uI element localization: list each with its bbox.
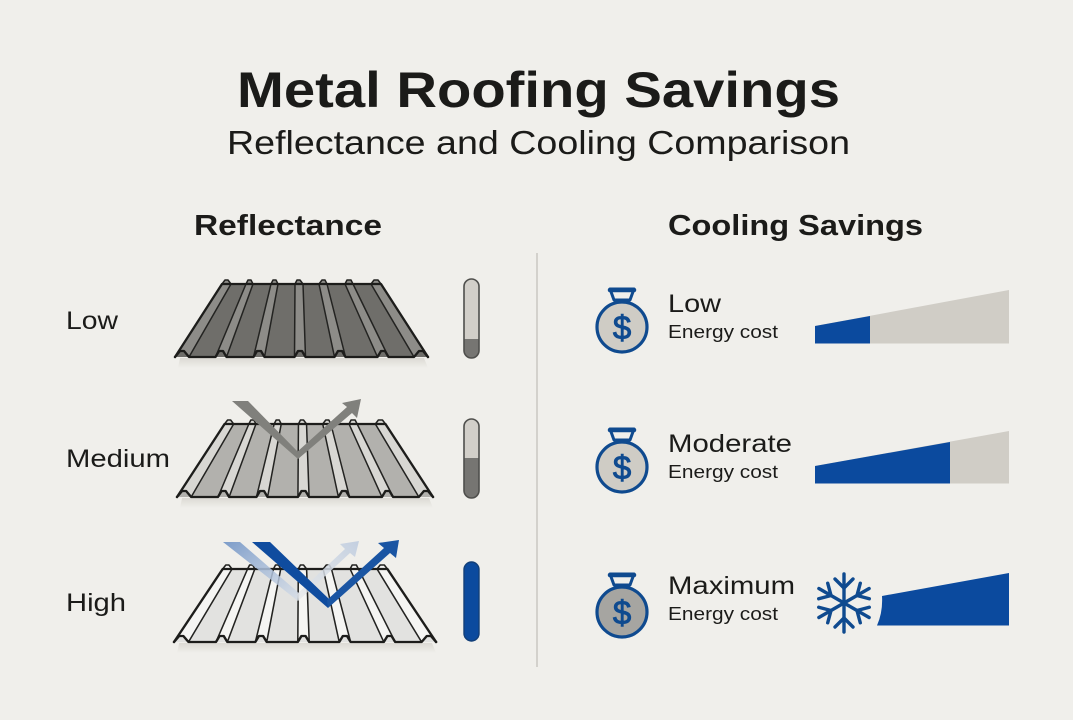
reflection arrows: medium (232, 399, 361, 459)
caption: energy cost, low: Energy cost (668, 322, 778, 342)
reflection arrows: high (223, 540, 399, 608)
roof panel: low reflectance, dark (175, 280, 428, 368)
heading: reflectance: Reflectance (194, 210, 382, 242)
reflectance gauge: low (464, 279, 479, 358)
label: moderate savings: Moderate (668, 430, 792, 458)
reflectance gauge: high (464, 562, 479, 641)
icon: money bag, low (597, 289, 647, 352)
icon: money bag, maximum (597, 574, 647, 637)
subtitle: Reflectance and Cooling Comparison (227, 124, 850, 161)
icon: money bag, maximum: $ (613, 594, 631, 631)
icon: money bag, low: $ (613, 309, 631, 346)
savings bar: low (815, 290, 1009, 344)
roof panel: medium reflectance, grey (177, 420, 433, 508)
savings bar: moderate (815, 431, 1009, 484)
caption: energy cost, maximum: Energy cost (668, 604, 778, 624)
caption: energy cost, moderate: Energy cost (668, 462, 778, 482)
title: Metal Roofing Savings (237, 62, 840, 118)
column divider (536, 253, 538, 667)
reflectance gauge: medium (464, 419, 479, 498)
row label: medium reflectance: Medium (66, 445, 170, 473)
savings bar: maximum (877, 573, 1009, 626)
label: low savings: Low (668, 290, 722, 318)
roof panel: high reflectance, light (174, 565, 436, 653)
row label: high reflectance: High (66, 589, 126, 617)
icon: money bag, moderate (597, 429, 647, 492)
heading: cooling savings: Cooling Savings (668, 210, 923, 242)
row label: low reflectance: Low (66, 307, 119, 335)
icon: money bag, moderate: $ (613, 449, 631, 486)
icon: snowflake (814, 574, 874, 632)
label: maximum savings: Maximum (668, 572, 795, 600)
